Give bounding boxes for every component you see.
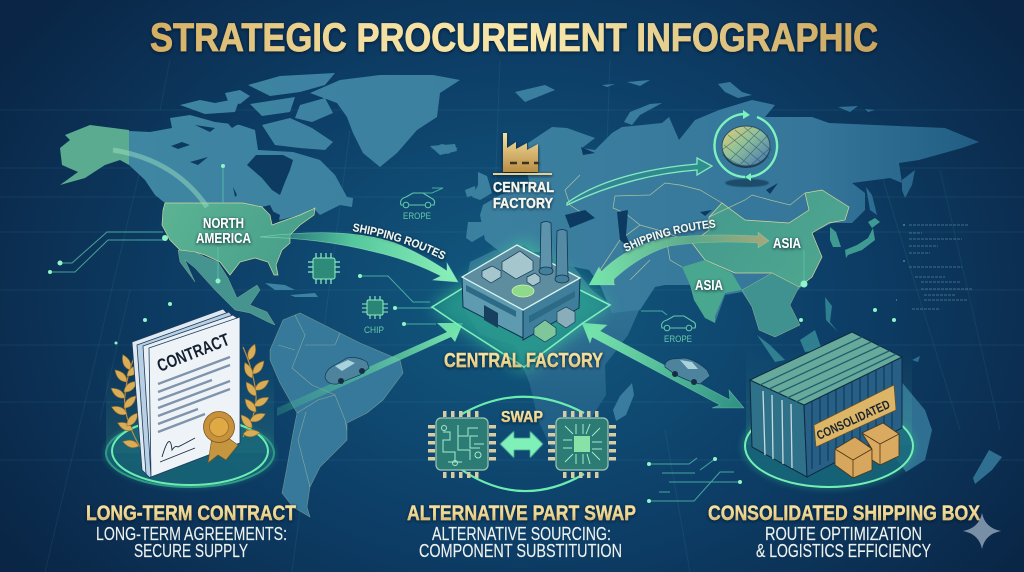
icon: outline car with erope label: EROPE [403,211,431,222]
mongolia and central asia borders [565,175,805,285]
eurasia [480,100,979,337]
icon: outline car with erope label [401,193,435,222]
label: central factory top: CENTRAL [493,180,554,196]
arrow: factory and container [582,323,744,408]
caption: long-term contract: SECURE SUPPLY [134,541,248,561]
laurel left [109,353,142,449]
caption: long-term contract [86,501,296,561]
label: swap: SWAP [501,409,543,426]
swap double arrow [500,431,543,458]
label: central factory bottom: CENTRAL FACTORY [444,350,604,372]
wafer grid [722,127,772,167]
cardboard boxes [835,437,872,478]
arrow: factory to wafer [567,158,712,205]
factory walls [462,277,523,338]
factory platform [432,240,610,372]
label: asia lower: ASIA [695,278,723,294]
ring arrowheads [743,110,751,181]
circuit traces [50,166,804,501]
label: north america: NORTH [203,216,244,232]
container platform [741,345,917,490]
iceland and uk and iberia [431,144,492,242]
consolidated plate [814,385,896,447]
mexico and central america [178,250,275,325]
label: north america [196,216,251,247]
caption: long-term contract: LONG-TERM CONTRACT [86,501,296,525]
indonesia and philippines [757,297,838,362]
canada [129,115,353,220]
india highlight [682,260,742,323]
korea [830,227,841,247]
wax seal ribbons [208,435,238,463]
usa highlight [162,203,315,275]
door bars [763,391,792,468]
label: asia upper: ASIA [773,236,801,252]
side ribs [812,361,892,469]
trace end dots [48,164,896,503]
roof glow pad [512,285,534,297]
caption: alternative part swap: ALTERNATIVE PART SWAP [407,501,636,525]
label: shipping routes right: SHIPPING ROUTES [622,218,718,254]
icon: outline car with erope label lower: EROPE [664,334,692,345]
wall windows [466,285,516,317]
caribbean [265,283,318,297]
arrow: north america to factory [260,233,458,282]
sparkle mark [963,513,1001,549]
label: central factory top [493,180,554,212]
inland seas [565,147,778,250]
factory roof [462,245,580,310]
signature [160,438,195,462]
caption: alternative part swap: ALTERNATIVE SOURCING: [432,524,611,544]
africa [462,250,640,450]
icon: factory gold [493,133,552,174]
caption: long-term contract: LONG-TERM AGREEMENTS: [96,524,287,544]
label: shipping routes left: SHIPPING ROUTES [352,223,447,262]
great lakes and arctic inlets [171,120,280,225]
china highlight [692,190,849,287]
alaska highlight [60,125,129,185]
code panel [896,225,972,309]
crate [534,320,556,342]
roof ribs [760,337,896,402]
greenland [310,75,460,167]
side annex [557,307,575,328]
icon: solid car on container arrow [665,358,710,385]
container front doors [750,380,807,477]
arrow: alaska to usa [113,150,207,207]
caption: consolidated shipping box: & LOGISTICS EFFICIENCY [756,541,931,561]
title: STRATEGIC PROCUREMENT INFOGRAPHIC [150,16,878,60]
caption: consolidated shipping box [708,501,981,561]
wafer disc [722,128,770,168]
arrow: contract to factory [277,323,463,416]
roof blocks [502,251,533,279]
chip left [428,411,496,478]
container roof [750,332,902,405]
laurel right [238,343,271,437]
container side [804,357,902,477]
icon: small chip with chip label: CHIP [364,325,384,336]
australia and new zealand [890,356,1002,484]
caption: consolidated shipping box: ROUTE OPTIMIZATION [765,524,922,544]
back pages [132,309,232,478]
icon: outline car with erope label lower [662,316,696,345]
southeast asia [742,273,800,337]
contract platform [104,360,276,488]
icon: small chip top [308,253,340,284]
wax seal [204,412,234,442]
label: north america: AMERICA [196,231,251,247]
swap ring [462,397,584,491]
chip right [548,411,616,478]
japan [845,218,880,258]
wafer shadow [725,179,769,187]
shipping container [750,332,902,478]
madagascar [613,383,634,421]
south america [270,313,403,517]
front page [149,317,240,477]
canadian arctic islands [180,73,457,155]
contract heading: CONTRACT [154,329,232,376]
contract document [132,309,240,478]
south america borders [278,315,347,487]
arrow: factory and asia [589,232,769,285]
central factory building [462,222,580,342]
consolidated label: CONSOLIDATED [814,397,892,443]
icon: small chip with chip label [362,296,388,336]
caption: alternative part swap [407,501,636,561]
loading door [484,305,498,328]
hudson bay [247,155,293,195]
icon: solid car on contract arrow [325,358,369,384]
smokestacks [539,222,569,283]
recycling ring [714,114,777,177]
wafer with recycling ring [714,110,777,187]
label: central factory top: FACTORY [493,196,553,212]
text lines [158,357,230,432]
caption: alternative part swap: COMPONENT SUBSTITUTION [419,541,622,561]
arctic and pacific islands [515,80,915,215]
